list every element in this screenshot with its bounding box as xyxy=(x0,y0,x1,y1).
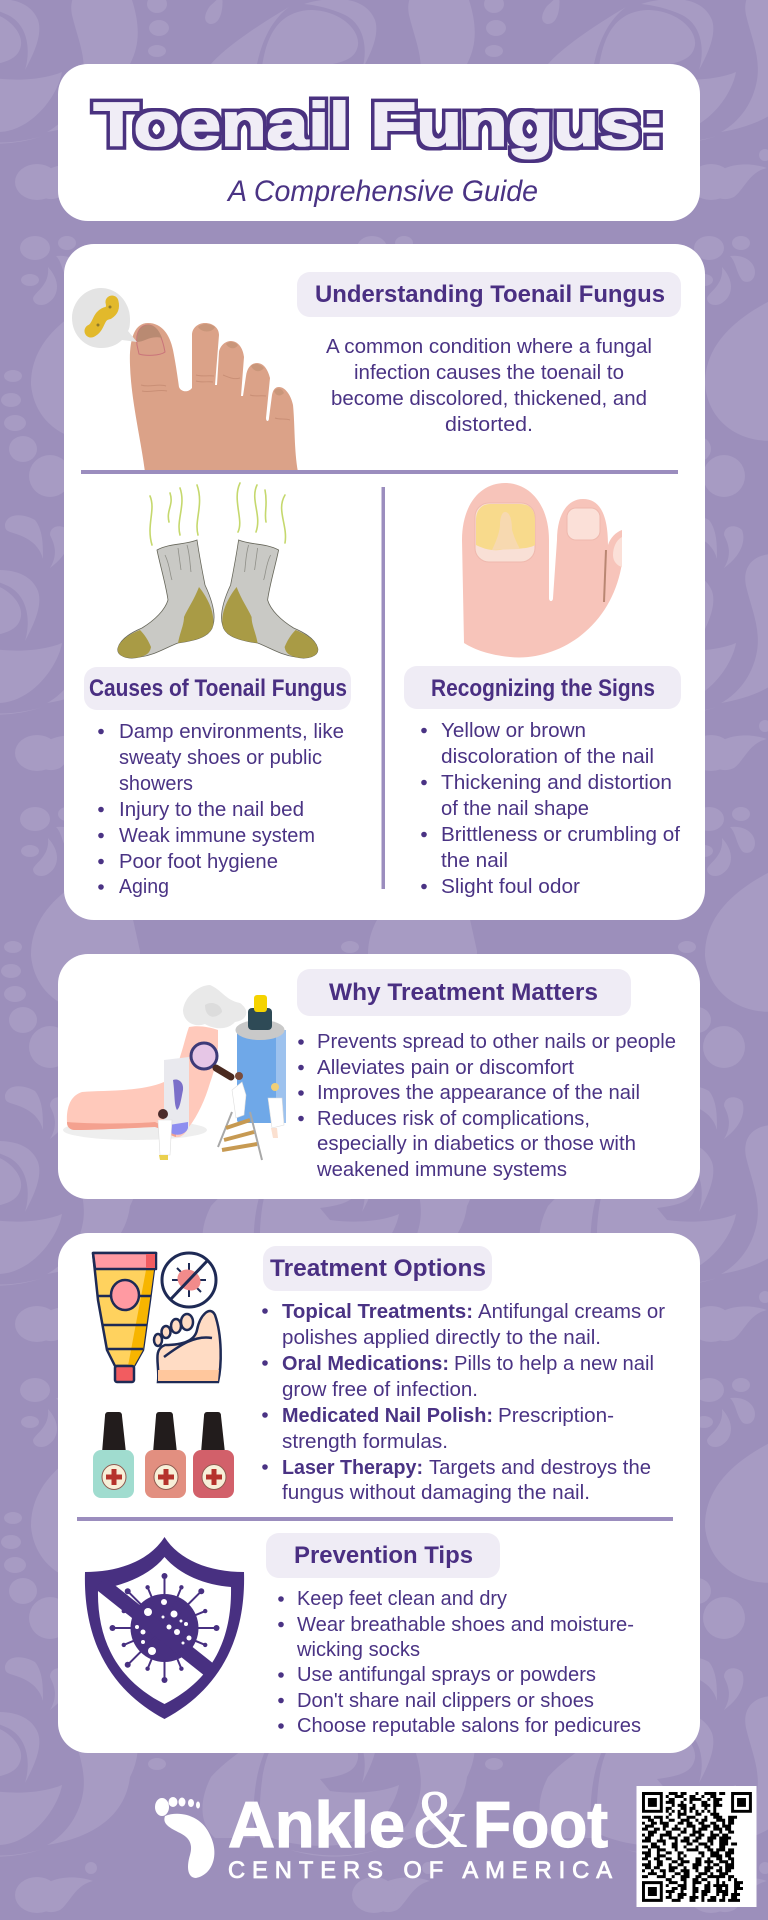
heading: Prevention Tips: Prevention Tips xyxy=(294,1542,473,1569)
panel: title xyxy=(58,64,700,221)
icon: no bugs sign xyxy=(162,1253,216,1307)
list: causes xyxy=(98,720,344,898)
list: signs: Brittleness or crumbling of xyxy=(441,823,680,846)
text: definition: A common condition where a fungal xyxy=(326,335,652,358)
heading: Understanding Toenail Fungus: Understanding Toenail Fungus xyxy=(315,281,665,308)
list: treatments: strength formulas. xyxy=(282,1430,448,1453)
list: signs: Thickening and distortion xyxy=(441,771,672,794)
heading: Treatment Options: Treatment Options xyxy=(270,1255,486,1282)
text: definition: infection causes the toenail to xyxy=(354,361,624,384)
list: prevention tips: wicking socks xyxy=(296,1638,420,1661)
list: prevention tips: Use antifungal sprays or powders xyxy=(297,1663,596,1686)
heading: Why Treatment Matters xyxy=(297,969,631,1016)
icon: shield with crossed-out virus xyxy=(85,1537,244,1719)
list: causes: Weak immune system xyxy=(119,824,315,847)
list: treatments: grow free of infection. xyxy=(282,1378,478,1401)
heading: Causes of Toenail Fungus: Causes of Toenail Fungus xyxy=(89,675,347,702)
list: causes: Aging xyxy=(119,875,169,898)
list: causes: showers xyxy=(119,772,193,795)
heading: Recognizing the Signs: Recognizing the Signs xyxy=(431,675,655,702)
list: signs: Yellow or brown xyxy=(441,719,586,742)
icon: bare foot xyxy=(154,1311,221,1382)
title: Toenail Fungus: xyxy=(94,90,666,160)
logo: Ankle & Foot Centers of America: & xyxy=(413,1773,468,1866)
list: treatments: polishes applied directly to the nail. xyxy=(282,1326,601,1349)
list: signs xyxy=(421,719,680,898)
heading: Why Treatment Matters: Why Treatment Matters xyxy=(329,979,598,1006)
list: causes: Poor foot hygiene xyxy=(119,850,278,873)
heading: Recognizing the Signs xyxy=(404,666,681,709)
heading: Prevention Tips xyxy=(266,1533,500,1578)
list: treatments: fungus without damaging the nail. xyxy=(282,1481,590,1504)
list: treatments: Antifungal creams or xyxy=(478,1300,665,1323)
list: signs: discoloration of the nail xyxy=(441,745,654,768)
list: prevention tips: Choose reputable salons for pedicures xyxy=(297,1714,641,1737)
list: treatments: Targets and destroys the xyxy=(429,1456,651,1479)
icon: ointment tube xyxy=(93,1253,156,1382)
logo: Ankle & Foot Centers of America: Foot xyxy=(473,1788,608,1861)
list: reasons: Reduces risk of complications, xyxy=(317,1107,590,1130)
subtitle: A Comprehensive Guide xyxy=(226,175,538,208)
list: causes: Damp environments, like xyxy=(119,720,344,743)
list: treatments: Medicated Nail Polish: xyxy=(282,1404,493,1427)
list: prevention tips: Don't share nail clippers or shoes xyxy=(297,1689,594,1712)
list: reasons: Improves the appearance of the nail xyxy=(317,1081,640,1104)
list: reasons: especially in diabetics or those with xyxy=(317,1132,636,1155)
logo: Ankle & Foot Centers of America: Ankle xyxy=(228,1788,405,1861)
panel: understanding, causes and signs xyxy=(64,244,705,920)
list: reasons: Alleviates pain or discomfort xyxy=(317,1056,574,1079)
list: causes: sweaty shoes or public xyxy=(119,746,322,769)
illustration: toe with yellow nail xyxy=(462,483,622,658)
list: prevention tips xyxy=(278,1587,641,1737)
icon: footprint xyxy=(155,1797,214,1878)
list: signs: the nail xyxy=(441,849,508,872)
list: reasons: weakened immune systems xyxy=(316,1158,567,1181)
illustration: toes with infected nail xyxy=(72,288,298,472)
list: signs: of the nail shape xyxy=(441,797,589,820)
list: prevention tips: Keep feet clean and dry xyxy=(297,1587,508,1610)
QR code xyxy=(636,1786,756,1907)
heading: Understanding Toenail Fungus xyxy=(297,272,681,317)
list: signs: Slight foul odor xyxy=(441,875,580,898)
list: reasons: Prevents spread to other nails or people xyxy=(317,1030,676,1053)
heading: Treatment Options xyxy=(263,1246,492,1291)
text: definition: distorted. xyxy=(445,413,533,436)
text: definition: become discolored, thickened, and xyxy=(331,387,647,410)
list: treatments: Topical Treatments: xyxy=(282,1300,473,1323)
list: reasons xyxy=(298,1030,676,1181)
text: definition xyxy=(326,335,652,436)
icon: spray can xyxy=(236,995,286,1123)
list: causes: Injury to the nail bed xyxy=(119,798,304,821)
icon: bacterium speech bubble xyxy=(72,288,137,348)
list: treatments: Oral Medications: xyxy=(282,1352,449,1375)
list: treatments: Prescription- xyxy=(498,1404,614,1427)
list: treatments: Pills to help a new nail xyxy=(454,1352,654,1375)
panel: why treatment matters xyxy=(58,954,700,1199)
illustration: foot, spray and doctors xyxy=(63,985,286,1160)
list: treatments: Laser Therapy: xyxy=(282,1456,423,1479)
logo: Ankle & Foot Centers of America xyxy=(155,1773,612,1884)
list: prevention tips: Wear breathable shoes and moisture- xyxy=(297,1613,634,1636)
logo: Ankle & Foot Centers of America: CENTERS OF AMERICA xyxy=(228,1858,612,1884)
panel: treatment and prevention xyxy=(58,1233,700,1753)
heading: Causes of Toenail Fungus xyxy=(84,667,351,710)
list: treatments xyxy=(262,1300,665,1504)
icon: medicated nail polish bottles xyxy=(93,1412,234,1498)
illustration: smelly socks xyxy=(118,483,318,658)
